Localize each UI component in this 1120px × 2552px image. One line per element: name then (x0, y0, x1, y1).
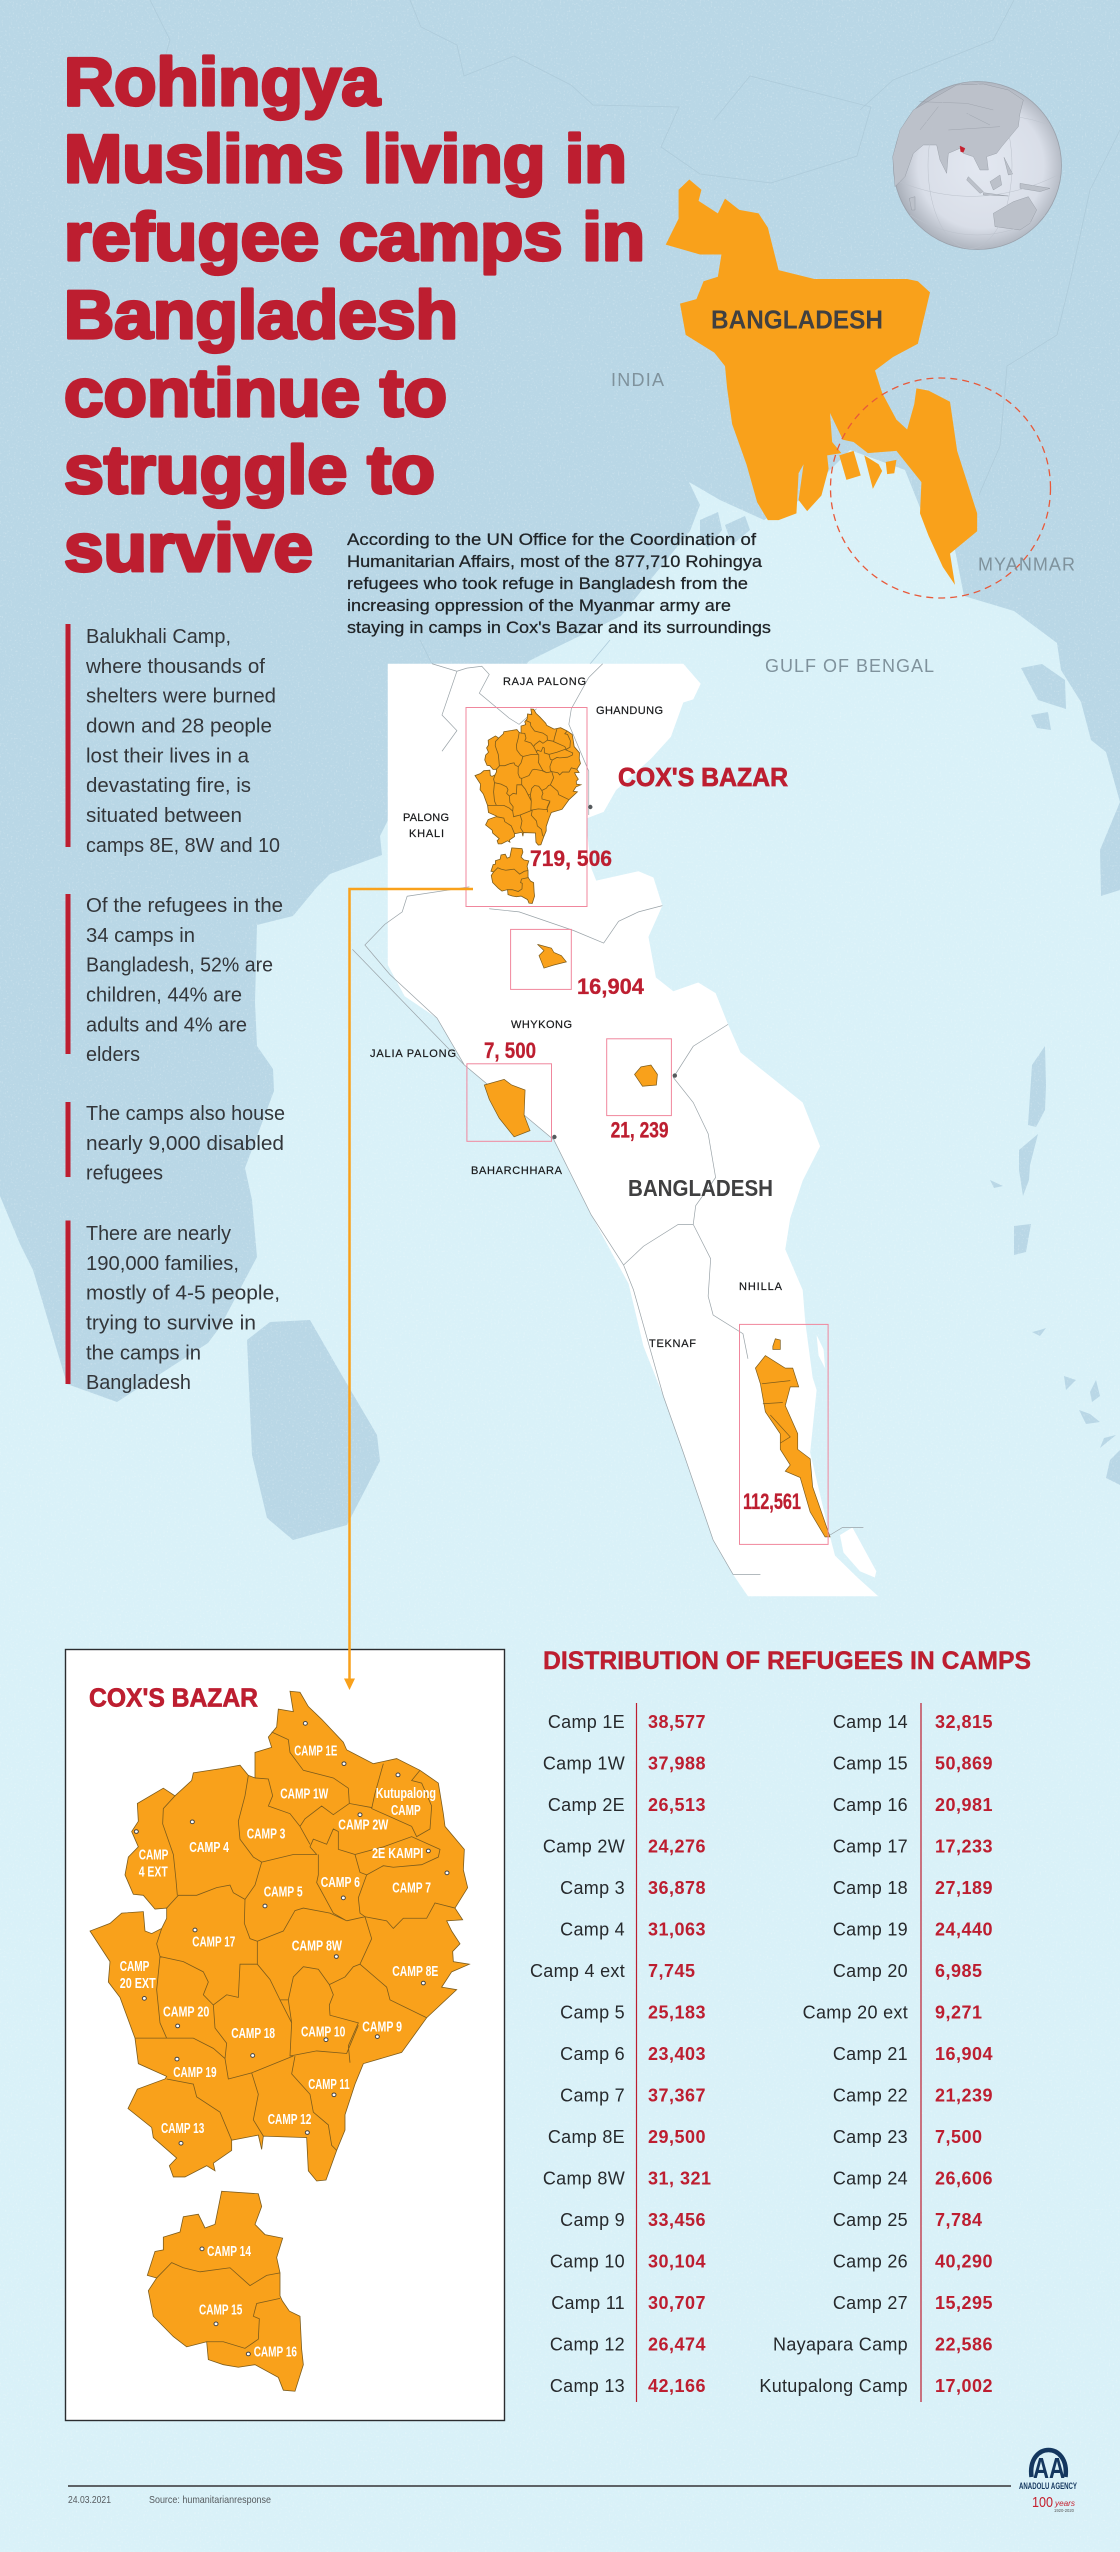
fact: Balukhali fire: down and 28 people (86, 714, 272, 738)
logo: Anadolu Agency: years (1054, 2498, 1076, 2508)
table: left column: Camp 9 (560, 2210, 625, 2230)
fact: demographics: Bangladesh, 52% are (86, 954, 273, 977)
detail heading: COX'S BAZAR (89, 1682, 258, 1712)
table: left column: Camp 11 (551, 2293, 625, 2313)
table: right column: 32,815 (935, 1712, 993, 1732)
camp name labels: CAMP (120, 1959, 150, 1975)
table: left column: Camp 8W (543, 2168, 625, 2188)
table: left column: Camp 10 (550, 2252, 625, 2272)
table: right column: Camp 24 (833, 2168, 908, 2188)
district labels: PALONG (403, 812, 449, 824)
table heading: DISTRIBUTION OF REFUGEES IN CAMPS (543, 1647, 1031, 1675)
table: left column: 37,367 (648, 2086, 706, 2106)
table: right column: 24,440 (935, 1920, 993, 1940)
table: right column: Kutupalong Camp (759, 2376, 908, 2396)
district labels: KHALI (409, 828, 444, 840)
fact: families: mostly of 4-5 people, (86, 1282, 280, 1305)
title: survive (64, 510, 313, 586)
district labels: TEKNAF (649, 1338, 696, 1350)
title (64, 44, 645, 586)
footer date: 24.03.2021 (68, 2494, 111, 2506)
camp name labels: CAMP (139, 1848, 169, 1864)
camp name labels (120, 1744, 439, 2360)
logo: Anadolu Agency: ANADOLU AGENCY (1019, 2481, 1077, 2492)
title: Bangladesh (64, 277, 458, 353)
table: left column: 31,063 (648, 1920, 706, 1940)
table: right column: 9,271 (935, 2002, 983, 2022)
label: Bangladesh on large map: BANGLADESH (711, 304, 883, 334)
detail camp shapes (90, 1691, 469, 2391)
logo: Anadolu Agency: AA (1033, 2453, 1065, 2485)
district labels: GHANDUNG (596, 705, 663, 717)
table: right column: 6,985 (935, 1961, 983, 1981)
camp name labels: CAMP 12 (268, 2112, 311, 2128)
fact: Balukhali fire: situated between (86, 804, 242, 827)
fact: demographics (66, 894, 283, 1066)
camp name labels: CAMP 2W (338, 1817, 389, 1833)
fact: Balukhali fire (66, 624, 280, 857)
fact: families (66, 1220, 280, 1394)
refugee counts per area (484, 846, 801, 1514)
district labels: RAJA PALONG (503, 676, 586, 688)
table: right column: 17,002 (935, 2376, 993, 2396)
footer rule (68, 2485, 1011, 2487)
table: left column: Camp 13 (550, 2376, 625, 2396)
fact: Balukhali fire: devastating fire, is (86, 774, 251, 797)
table: right column: 40,290 (935, 2252, 993, 2272)
table: left column: 36,878 (648, 1878, 706, 1898)
camp centre markers (134, 1722, 449, 2356)
camp name labels: CAMP 10 (301, 2025, 345, 2041)
fact: demographics: adults and 4% are (86, 1013, 247, 1036)
camp name labels: CAMP 4 (189, 1840, 229, 1856)
camp name labels: CAMP 1E (294, 1744, 338, 1760)
table: left column: 25,183 (648, 2002, 706, 2022)
intro paragraph: staying in camps in Cox's Bazar and its surroundings (347, 619, 771, 637)
district labels: NHILLA (739, 1281, 783, 1293)
table: right column: Camp 26 (833, 2252, 908, 2272)
table: right column: 50,869 (935, 1754, 993, 1774)
fact: Balukhali fire: camps 8E, 8W and 10 (86, 834, 280, 857)
table: right column: Camp 22 (833, 2086, 908, 2106)
district labels: JALIA PALONG (370, 1048, 456, 1060)
table: right column: 7,784 (935, 2210, 983, 2230)
label: India: INDIA (611, 370, 664, 390)
table: left column: Camp 6 (560, 2044, 625, 2064)
camp name labels: CAMP 6 (321, 1875, 360, 1891)
table: right column: Camp 18 (833, 1878, 908, 1898)
table: left column: 7,745 (648, 1961, 696, 1981)
table: right column: Camp 14 (833, 1712, 908, 1732)
title: Rohingya (64, 44, 381, 120)
table: right column: Camp 25 (833, 2210, 908, 2230)
camp name labels: CAMP 19 (173, 2065, 217, 2081)
camp name labels: 2E KAMPI (372, 1846, 423, 1862)
table: left column: Camp 1W (543, 1754, 625, 1774)
intro paragraph: increasing oppression of the Myanmar army are (347, 597, 731, 615)
camp name labels: CAMP 14 (207, 2244, 251, 2260)
table: left column: 33,456 (648, 2210, 706, 2230)
fact: families: There are nearly (86, 1222, 232, 1245)
table: right column: Camp 21 (833, 2044, 908, 2064)
regional map: Cox's Bazar district (352, 664, 878, 1596)
camp name labels: CAMP 17 (192, 1934, 235, 1950)
table: left column: 29,500 (648, 2127, 706, 2147)
table: left column: Camp 5 (560, 2002, 625, 2022)
panel: Cox's Bazar detail map (66, 1650, 504, 2420)
fact: Balukhali fire: where thousands of (85, 655, 265, 678)
connector arrow to Cox's Bazar detail (344, 889, 473, 1690)
footer source: Source: humanitarianresponse (149, 2494, 271, 2506)
camp name labels: CAMP 8W (292, 1938, 342, 1954)
table: right column: 16,904 (935, 2044, 993, 2064)
dashed highlight circle (830, 378, 1050, 598)
table: left column: Camp 4 ext (530, 1961, 625, 1981)
fact: Balukhali fire: shelters were burned (86, 685, 276, 708)
title: struggle to (64, 432, 435, 508)
refugee counts per area: 7, 500 (484, 1038, 536, 1063)
table: left column: Camp 7 (560, 2086, 625, 2106)
camp name labels: Kutupalong (376, 1786, 436, 1802)
background: land masses over the sea (247, 512, 1120, 1540)
table: right column (759, 1703, 993, 2402)
district labels: WHYKONG (511, 1019, 572, 1031)
camp name labels: CAMP 13 (161, 2121, 204, 2137)
title: refugee camps in (64, 199, 645, 275)
table: left column: 30,104 (648, 2252, 706, 2272)
table: right column: 27,189 (935, 1878, 993, 1898)
refugee counts per area: 719, 506 (530, 846, 612, 871)
logo: Anadolu Agency (1019, 2450, 1077, 2513)
logo: Anadolu Agency: 100 (1032, 2494, 1053, 2511)
table: left column: 37,988 (648, 1754, 706, 1774)
table: left column: 24,276 (648, 1836, 706, 1856)
table: right column: 17,233 (935, 1836, 993, 1856)
table: right column: 26,606 (935, 2168, 993, 2188)
camp name labels: CAMP 20 (163, 2005, 209, 2021)
camp name labels: CAMP 16 (254, 2344, 297, 2360)
camp name labels: CAMP 5 (264, 1884, 303, 1900)
table: left column: Camp 8E (548, 2127, 625, 2147)
table: left column: 38,577 (648, 1712, 706, 1732)
fact: families: Bangladesh (86, 1371, 191, 1394)
table: right column: Camp 16 (833, 1795, 908, 1815)
fact: disabled refugees (66, 1102, 285, 1185)
pink selection boxes (466, 708, 828, 1544)
Bangladesh large map shape (666, 179, 977, 585)
label: Gulf of Bengal: GULF OF BENGAL (765, 656, 934, 676)
table: left column: Camp 1E (548, 1712, 625, 1732)
table: right column: 20,981 (935, 1795, 993, 1815)
camp name labels: CAMP 3 (247, 1826, 285, 1842)
fact: demographics: elders (86, 1043, 140, 1066)
district labels: BAHARCHHARA (471, 1165, 563, 1177)
table: right column: Camp 15 (833, 1754, 908, 1774)
fact: disabled refugees: The camps also house (86, 1102, 285, 1125)
camp name labels: CAMP 15 (199, 2303, 242, 2319)
logo: Anadolu Agency: 1920-2020 (1054, 2508, 1074, 2513)
table: right column: Camp 20 ext (803, 2002, 908, 2022)
title: Muslims living in (64, 121, 627, 197)
town markers (552, 805, 677, 1139)
camp name labels: CAMP (391, 1803, 421, 1819)
table: right column: Nayapara Camp (773, 2334, 908, 2354)
table: left column: 23,403 (648, 2044, 706, 2064)
camp name labels: 4 EXT (139, 1864, 168, 1880)
table: right column: Camp 27 (833, 2293, 908, 2313)
table: right column: 15,295 (935, 2293, 993, 2313)
fact: demographics: 34 camps in (86, 924, 195, 947)
refugee counts per area: 112,561 (743, 1489, 801, 1514)
label: Bangladesh on regional map: BANGLADESH (628, 1175, 773, 1201)
camp name labels: CAMP 18 (231, 2026, 275, 2042)
table: left column: 30,707 (648, 2293, 706, 2313)
refugee counts per area: 21, 239 (611, 1118, 669, 1142)
camp name labels: 20 EXT (120, 1976, 156, 1992)
table: left column: Camp 2W (543, 1836, 625, 1856)
camp name labels: CAMP 11 (308, 2077, 350, 2093)
table: right column: Camp 23 (833, 2127, 908, 2147)
fact: demographics: Of the refugees in the (86, 894, 283, 917)
label: Myanmar: MYANMAR (978, 554, 1075, 574)
globe locator (893, 82, 1062, 250)
intro paragraph: According to the UN Office for the Coordination of (347, 531, 756, 549)
camp name labels: CAMP 7 (392, 1881, 431, 1897)
camp name labels: CAMP 8E (392, 1964, 439, 1980)
table: right column: Camp 17 (833, 1836, 908, 1856)
fact: families: trying to survive in (86, 1312, 256, 1334)
table: left column: Camp 2E (548, 1795, 625, 1815)
table: right column: Camp 20 (833, 1961, 908, 1981)
table: left column: 42,166 (648, 2376, 706, 2396)
fact: families: 190,000 families, (86, 1252, 239, 1275)
table: left column: Camp 4 (560, 1920, 625, 1940)
camp name labels: CAMP 9 (362, 2020, 402, 2036)
table: right column: 21,239 (935, 2086, 993, 2106)
table: right column: 7,500 (935, 2127, 983, 2147)
table: left column (530, 1703, 712, 2402)
table: right column: 22,586 (935, 2334, 993, 2354)
fact: demographics: children, 44% are (86, 984, 242, 1006)
camp name labels: CAMP 1W (280, 1786, 329, 1802)
table: left column: 26,513 (648, 1795, 706, 1815)
fact: disabled refugees: nearly 9,000 disabled (86, 1132, 284, 1155)
label: Cox's Bazar: COX'S BAZAR (618, 762, 788, 792)
table: left column: 31, 321 (648, 2168, 712, 2188)
fact: Balukhali fire: Balukhali Camp, (86, 625, 231, 648)
fact: disabled refugees: refugees (86, 1162, 163, 1185)
table: left column: Camp 12 (550, 2334, 625, 2354)
camp shapes in main block (475, 709, 581, 903)
refugee counts per area: 16,904 (577, 974, 645, 999)
intro paragraph: refugees who took refuge in Bangladesh from the (347, 575, 748, 593)
title: continue to (64, 355, 447, 431)
fact: families: the camps in (86, 1341, 201, 1364)
intro paragraph: Humanitarian Affairs, most of the 877,710 Rohingya (347, 553, 763, 571)
intro paragraph (347, 531, 771, 637)
table: left column: Camp 3 (560, 1878, 625, 1898)
district labels (370, 676, 783, 1350)
table: left column: 26,474 (648, 2334, 706, 2354)
table: right column: Camp 19 (833, 1920, 908, 1940)
fact: Balukhali fire: lost their lives in a (86, 744, 250, 767)
